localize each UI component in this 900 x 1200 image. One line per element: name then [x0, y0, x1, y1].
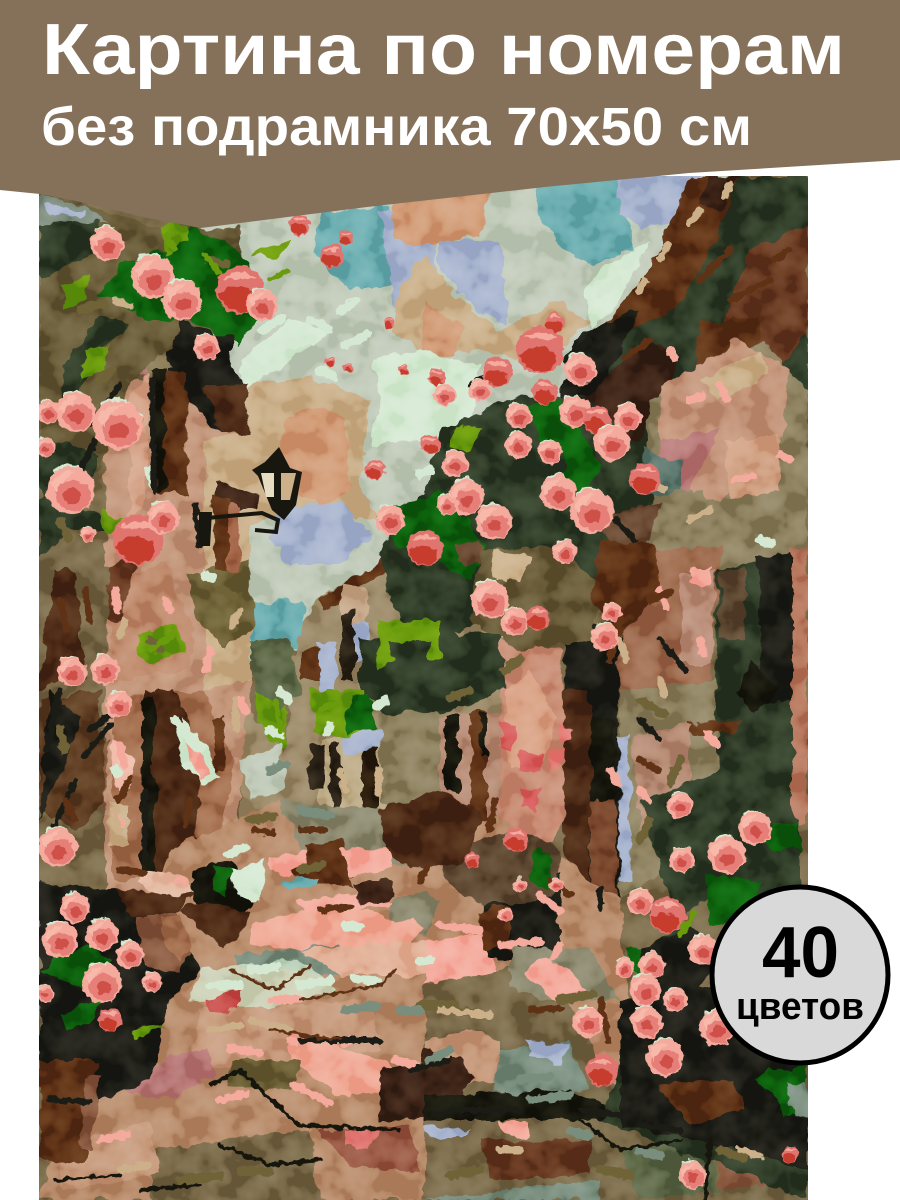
potted plants, left [39, 860, 265, 1165]
paint dabs [46, 184, 790, 1180]
dark eave and window [140, 336, 260, 573]
right building wall [615, 340, 808, 900]
central foliage mass [375, 395, 680, 670]
cobblestone street [39, 800, 808, 1200]
sky with clouds [200, 170, 730, 660]
lantern on bracket [199, 447, 302, 546]
badge: 40 colours: 40 [762, 913, 839, 993]
roses, central cluster [365, 312, 661, 651]
patchy paint tone overlay [39, 176, 808, 1200]
roof, right [559, 176, 808, 448]
central house [240, 550, 505, 845]
badge: 40 colours: цветов [736, 986, 864, 1028]
title: Картина по номерам [42, 10, 845, 90]
left foliage [39, 195, 290, 830]
subtitle: без подрамника 70х50 см [41, 97, 752, 157]
painting: flower alley [35, 170, 808, 1200]
roses, lower right [464, 791, 798, 1189]
roses, left side [35, 390, 179, 1032]
badge: 40 colours [712, 887, 888, 1063]
left building wall [84, 360, 255, 900]
potted plants, right [380, 770, 808, 1200]
pink arch column [498, 640, 574, 860]
roses, top left [90, 214, 409, 375]
arched doorway [562, 625, 620, 940]
street cracks [55, 965, 710, 1200]
header banner [0, 0, 900, 228]
